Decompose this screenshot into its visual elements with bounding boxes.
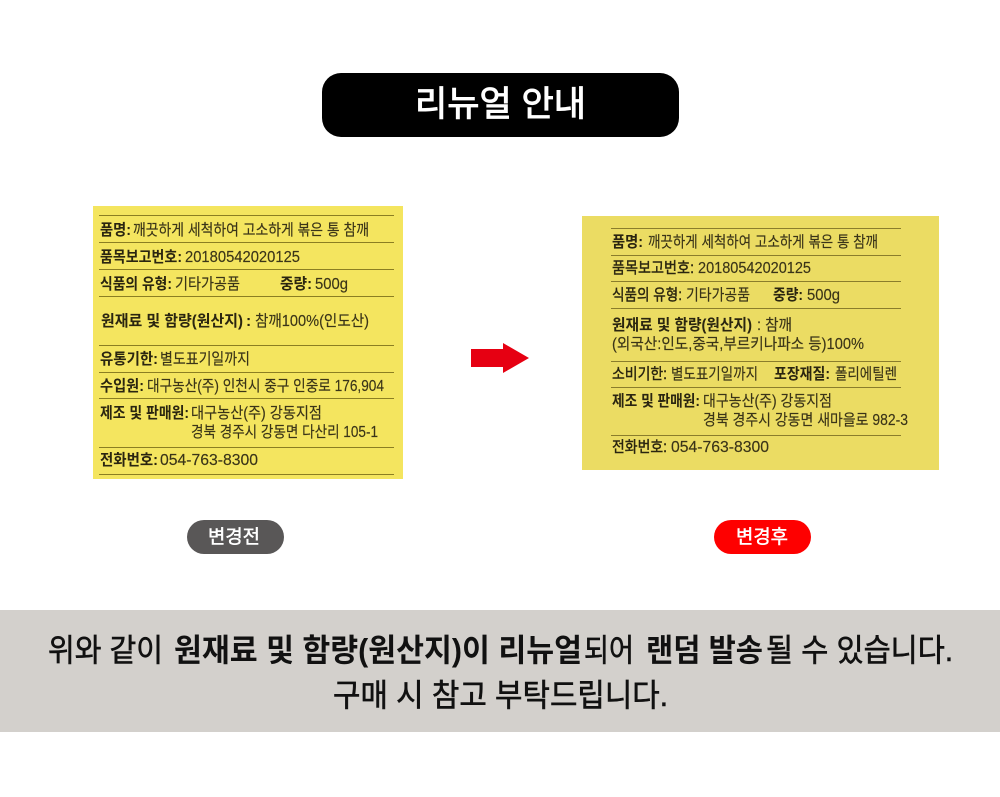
manufacturer row: 대구농산(주) 강동지점 xyxy=(191,404,322,422)
expiry and packaging row xyxy=(612,365,897,383)
badge: before: 변경전 xyxy=(208,526,260,548)
food type and weight row: 500g xyxy=(315,276,348,293)
ingredients row: 참깨100%(인도산) xyxy=(255,312,369,330)
expiry and packaging row: 소비기한: xyxy=(612,365,667,383)
panel: label after change xyxy=(582,216,939,470)
notice text line 1 xyxy=(48,632,953,668)
expiry and packaging row: 포장재질: xyxy=(774,365,830,383)
phone row: 054-763-8300 xyxy=(671,439,769,456)
expiry row: 유통기한: xyxy=(100,350,158,368)
product name row: 깨끗하게 세척하여 고소하게 볶은 통 참깨 xyxy=(648,233,878,251)
report number row: 품목보고번호: xyxy=(100,248,182,266)
phone row xyxy=(100,451,258,469)
food type and weight row: 식품의 유형: xyxy=(612,286,682,304)
phone row: 전화번호: xyxy=(100,451,158,469)
manufacturer row: 경북 경주시 강동면 다산리 105-1 xyxy=(191,423,378,441)
notice text line 1: 원재료 및 함량(원산지)이 리뉴얼 xyxy=(174,632,582,668)
arrow: before to after xyxy=(471,343,529,373)
notice band xyxy=(0,610,1000,732)
report number row xyxy=(100,248,300,266)
food type and weight row: 기타가공품 xyxy=(686,286,750,304)
food type and weight row: 기타가공품 xyxy=(175,275,240,293)
notice text line 1: 될 수 있습니다. xyxy=(766,632,953,668)
expiry row xyxy=(100,350,250,368)
ingredients row: : xyxy=(246,313,251,330)
manufacturer row: 제조 및 판매원: xyxy=(612,392,700,410)
notice text line 1: 위와 같이 xyxy=(48,632,163,668)
food type and weight row: 중량: xyxy=(280,275,312,293)
notice text line 1: 되어 xyxy=(584,632,634,668)
expiry and packaging row: 폴리에틸렌 xyxy=(835,365,897,383)
phone row xyxy=(612,438,769,456)
expiry row: 별도표기일까지 xyxy=(160,350,250,368)
notice text line 2: 구매 시 참고 부탁드립니다. xyxy=(333,677,668,713)
food type and weight row xyxy=(100,275,348,293)
manufacturer row xyxy=(100,404,378,441)
report number row: 20180542020125 xyxy=(698,260,811,277)
report number row xyxy=(612,259,811,277)
badge: after: 변경후 xyxy=(736,526,788,548)
importer row: 대구농산(주) 인천시 중구 인중로 176,904 xyxy=(147,377,384,395)
importer row: 수입원: xyxy=(100,377,144,395)
manufacturer row: 대구농산(주) 강동지점 xyxy=(703,392,832,410)
phone row: 054-763-8300 xyxy=(160,452,258,469)
title banner xyxy=(322,73,679,137)
ingredients row xyxy=(101,312,369,330)
phone row: 전화번호: xyxy=(612,438,667,456)
ingredients row: (외국산:인도,중국,부르키나파소 등)100% xyxy=(612,335,864,353)
product name row: 품명: xyxy=(100,221,131,239)
product name row: 깨끗하게 세척하여 고소하게 볶은 통 참깨 xyxy=(133,221,369,239)
food type and weight row: 식품의 유형: xyxy=(100,275,172,293)
title banner: 리뉴얼 안내 xyxy=(415,85,586,124)
manufacturer row xyxy=(612,392,908,429)
ingredients row: 원재료 및 함량(원산지) xyxy=(612,316,752,334)
ingredients row: 원재료 및 함량(원산지) xyxy=(101,312,243,330)
food type and weight row: 중량: xyxy=(773,286,803,304)
product name row: 품명: xyxy=(612,233,643,251)
report number row: 20180542020125 xyxy=(185,249,300,266)
ingredients row xyxy=(612,316,864,353)
badge: before xyxy=(187,520,284,554)
panel: label before change xyxy=(93,206,403,479)
food type and weight row xyxy=(612,286,840,304)
manufacturer row: 제조 및 판매원: xyxy=(100,404,189,422)
report number row: 품목보고번호: xyxy=(612,259,694,277)
expiry and packaging row: 별도표기일까지 xyxy=(671,365,758,383)
manufacturer row: 경북 경주시 강동면 새마을로 982-3 xyxy=(703,411,908,429)
badge: after xyxy=(714,520,811,554)
ingredients row: : 참깨 xyxy=(757,316,792,334)
food type and weight row: 500g xyxy=(807,287,840,304)
notice text line 1: 랜덤 발송 xyxy=(646,632,763,668)
